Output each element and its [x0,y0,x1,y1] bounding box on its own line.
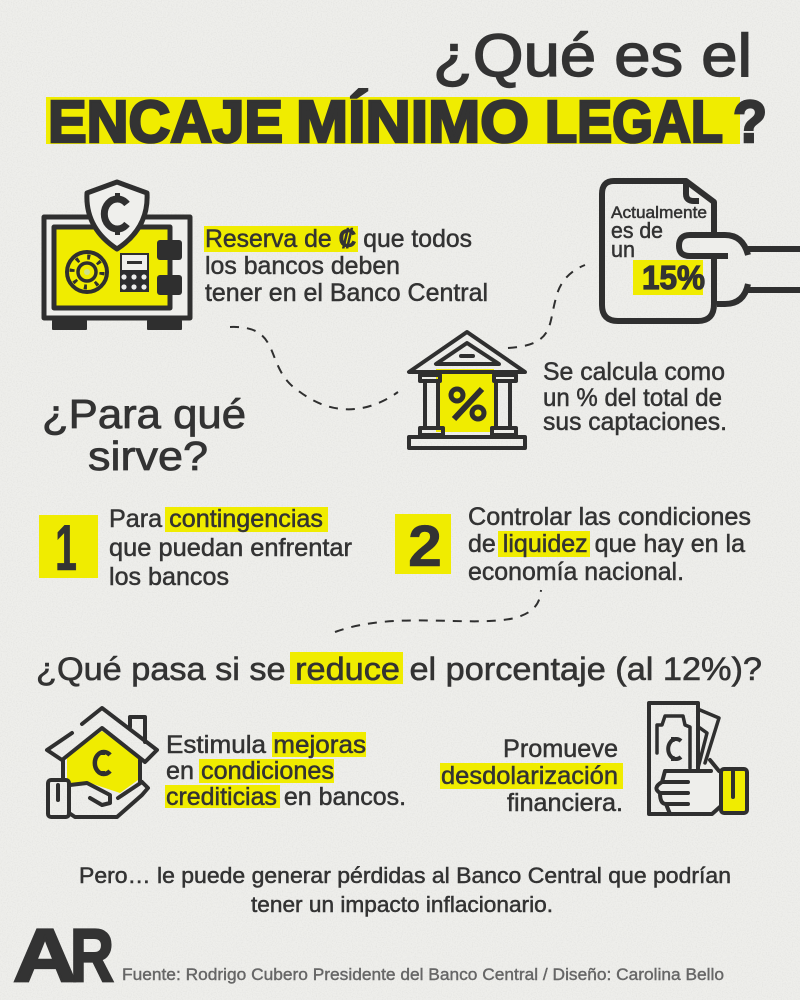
text: reason 2: Controlar las condiciones [468,503,751,531]
text: reason 1 [109,505,352,591]
number badge 2: 2 [408,514,442,579]
icon: document held by hand with 15%: Actualmente [611,203,707,222]
title: LEGAL [545,89,723,155]
text: stimulates improvements: crediticias en bancos. [166,783,406,811]
text: calculation: un % del total de [543,384,722,412]
icon: safe with shield [44,182,190,330]
dashed connector: safe to bank [230,327,398,409]
text: definition [204,225,488,307]
icon: bank with percent [409,332,525,448]
number badge 1: 1 [55,511,77,584]
heading: para qué sirve: sirve? [88,433,208,479]
icon: house in hand [47,708,157,817]
text: de-dollarization: Promueve [503,735,618,763]
title: ? [733,89,767,155]
title: MÍNIMO [296,89,529,155]
dashed connector: reasons to question [335,590,541,632]
text: de-dollarization [440,735,623,817]
text: caveat: Pero… le puede generar pérdidas al Banco Central que podrían [79,863,731,888]
logo: AR [13,913,114,997]
icon: document held by hand with 15% [602,181,800,321]
text: caveat [79,863,731,917]
text: calculation: sus captaciones. [543,408,727,436]
icon: hand holding money and card [649,703,747,815]
icon: document held by hand with 15%: un [611,237,635,262]
text: reason 2: de liquidez que hay en la [468,530,745,558]
text: definition: los bancos deben [205,252,400,280]
title: ¿Qué es el [433,22,752,89]
icon: document held by hand with 15%: es de [611,218,663,243]
text: stimulates improvements [165,731,406,811]
text: reason 2 [468,503,751,586]
text: calculation [543,358,727,436]
number badge 2 [395,514,451,579]
text: reason 1: los bancos [109,563,229,591]
text: caveat: tener un impacto inflacionario. [251,892,553,917]
number badge 1 [39,511,98,584]
logo: AR: R [70,913,114,997]
text: reason 1: que puedan enfrentar [109,534,352,562]
text: reason 2: economía nacional. [468,558,684,586]
text: de-dollarization: financiera. [507,789,623,817]
text: de-dollarization: desdolarización [441,762,618,790]
title: ENCAJE [48,89,283,155]
source credit: Fuente: Rodrigo Cubero Presidente del Banco Central / Diseño: Carolina Bello [122,965,724,984]
heading: para qué sirve: ¿Para qué [42,391,246,437]
text: definition: Reserva de ₡ que todos [205,225,472,253]
heading: reduction question: ¿Qué pasa si se reduce el porcentaje (al 12%)? [36,651,762,687]
text: stimulates improvements: en condiciones [166,757,334,785]
text: reason 1: Para contingencias [109,505,323,533]
title [46,22,767,155]
heading: para qué sirve [42,391,246,479]
text: stimulates improvements: Estimula mejoras [166,731,366,759]
logo: AR: A [13,913,77,997]
icon: document held by hand with 15%: 15% [642,259,705,296]
text: definition: tener en el Banco Central [205,279,488,307]
dashed connector: bank to document [508,265,585,348]
text: calculation: Se calcula como [543,358,725,386]
